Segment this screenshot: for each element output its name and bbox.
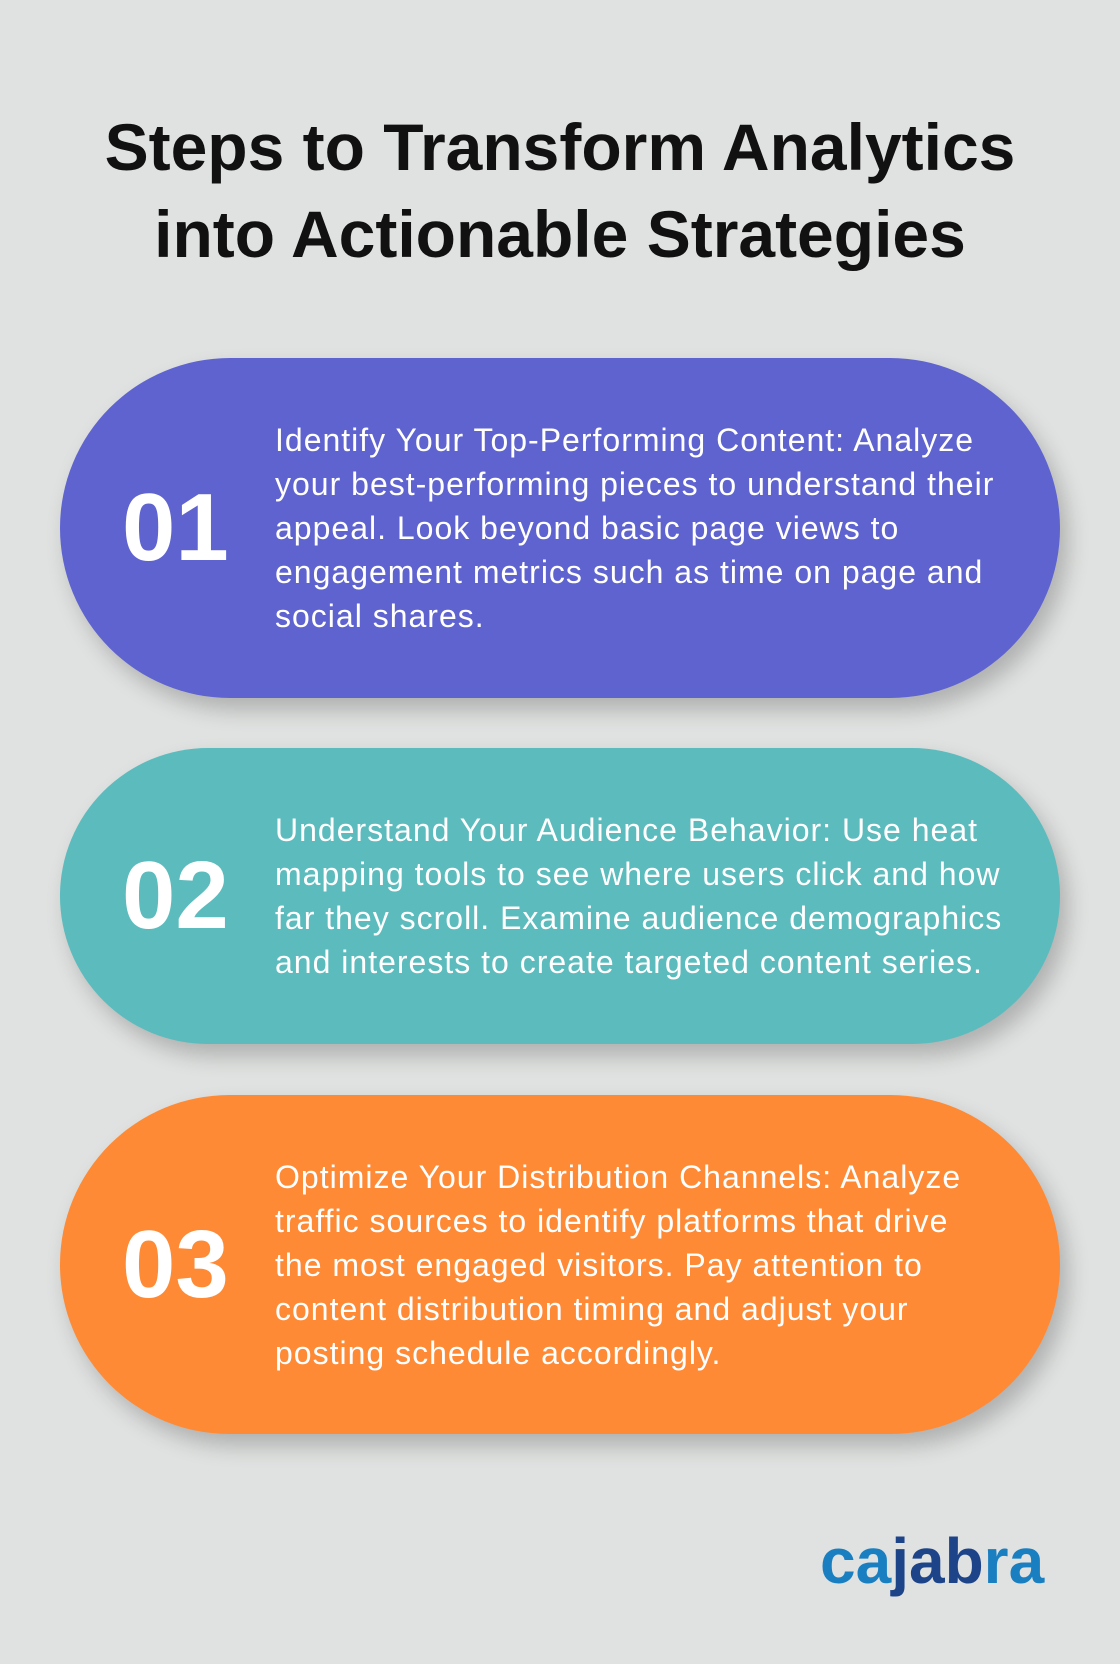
text: step 03: Optimize Your Distribution Channels: Analyze	[275, 1158, 961, 1194]
title	[105, 110, 1015, 271]
number 02: 02	[122, 842, 229, 949]
text: step 01: engagement metrics such as time on page and	[275, 554, 983, 590]
text: step 03: posting schedule accordingly.	[275, 1334, 721, 1370]
text: step 02: far they scroll. Examine audience demographics	[275, 900, 1002, 936]
text: step 01: social shares.	[275, 598, 485, 634]
text: step 02: Understand Your Audience Behavior: Use heat	[275, 812, 978, 848]
text: step 01: appeal. Look beyond basic page views to	[275, 510, 899, 546]
text: step 03: content distribution timing and adjust your	[275, 1290, 909, 1326]
text: step 03: the most engaged visitors. Pay attention to	[275, 1246, 923, 1282]
text: step 01: Identify Your Top-Performing Content: Analyze	[275, 422, 974, 458]
number 01: 01	[122, 474, 229, 581]
number 03: 03	[122, 1210, 229, 1318]
text: step 01	[275, 422, 994, 634]
panel: step 02	[60, 748, 1060, 1044]
text: step 02: and interests to create targeted content series.	[275, 944, 983, 980]
text: step 03	[275, 1158, 961, 1370]
title: into Actionable Strategies	[154, 197, 966, 271]
text: step 02: mapping tools to see where users click and how	[275, 856, 1000, 892]
text: step 03: traffic sources to identify platforms that drive	[275, 1202, 948, 1238]
title: Steps to Transform Analytics	[105, 110, 1015, 184]
panel: step 01	[60, 358, 1060, 698]
text: step 02	[275, 812, 1002, 980]
panel: step 03	[60, 1095, 1060, 1434]
text: step 01: your best-performing pieces to understand their	[275, 466, 994, 502]
logo: cajabra	[820, 1525, 1044, 1597]
